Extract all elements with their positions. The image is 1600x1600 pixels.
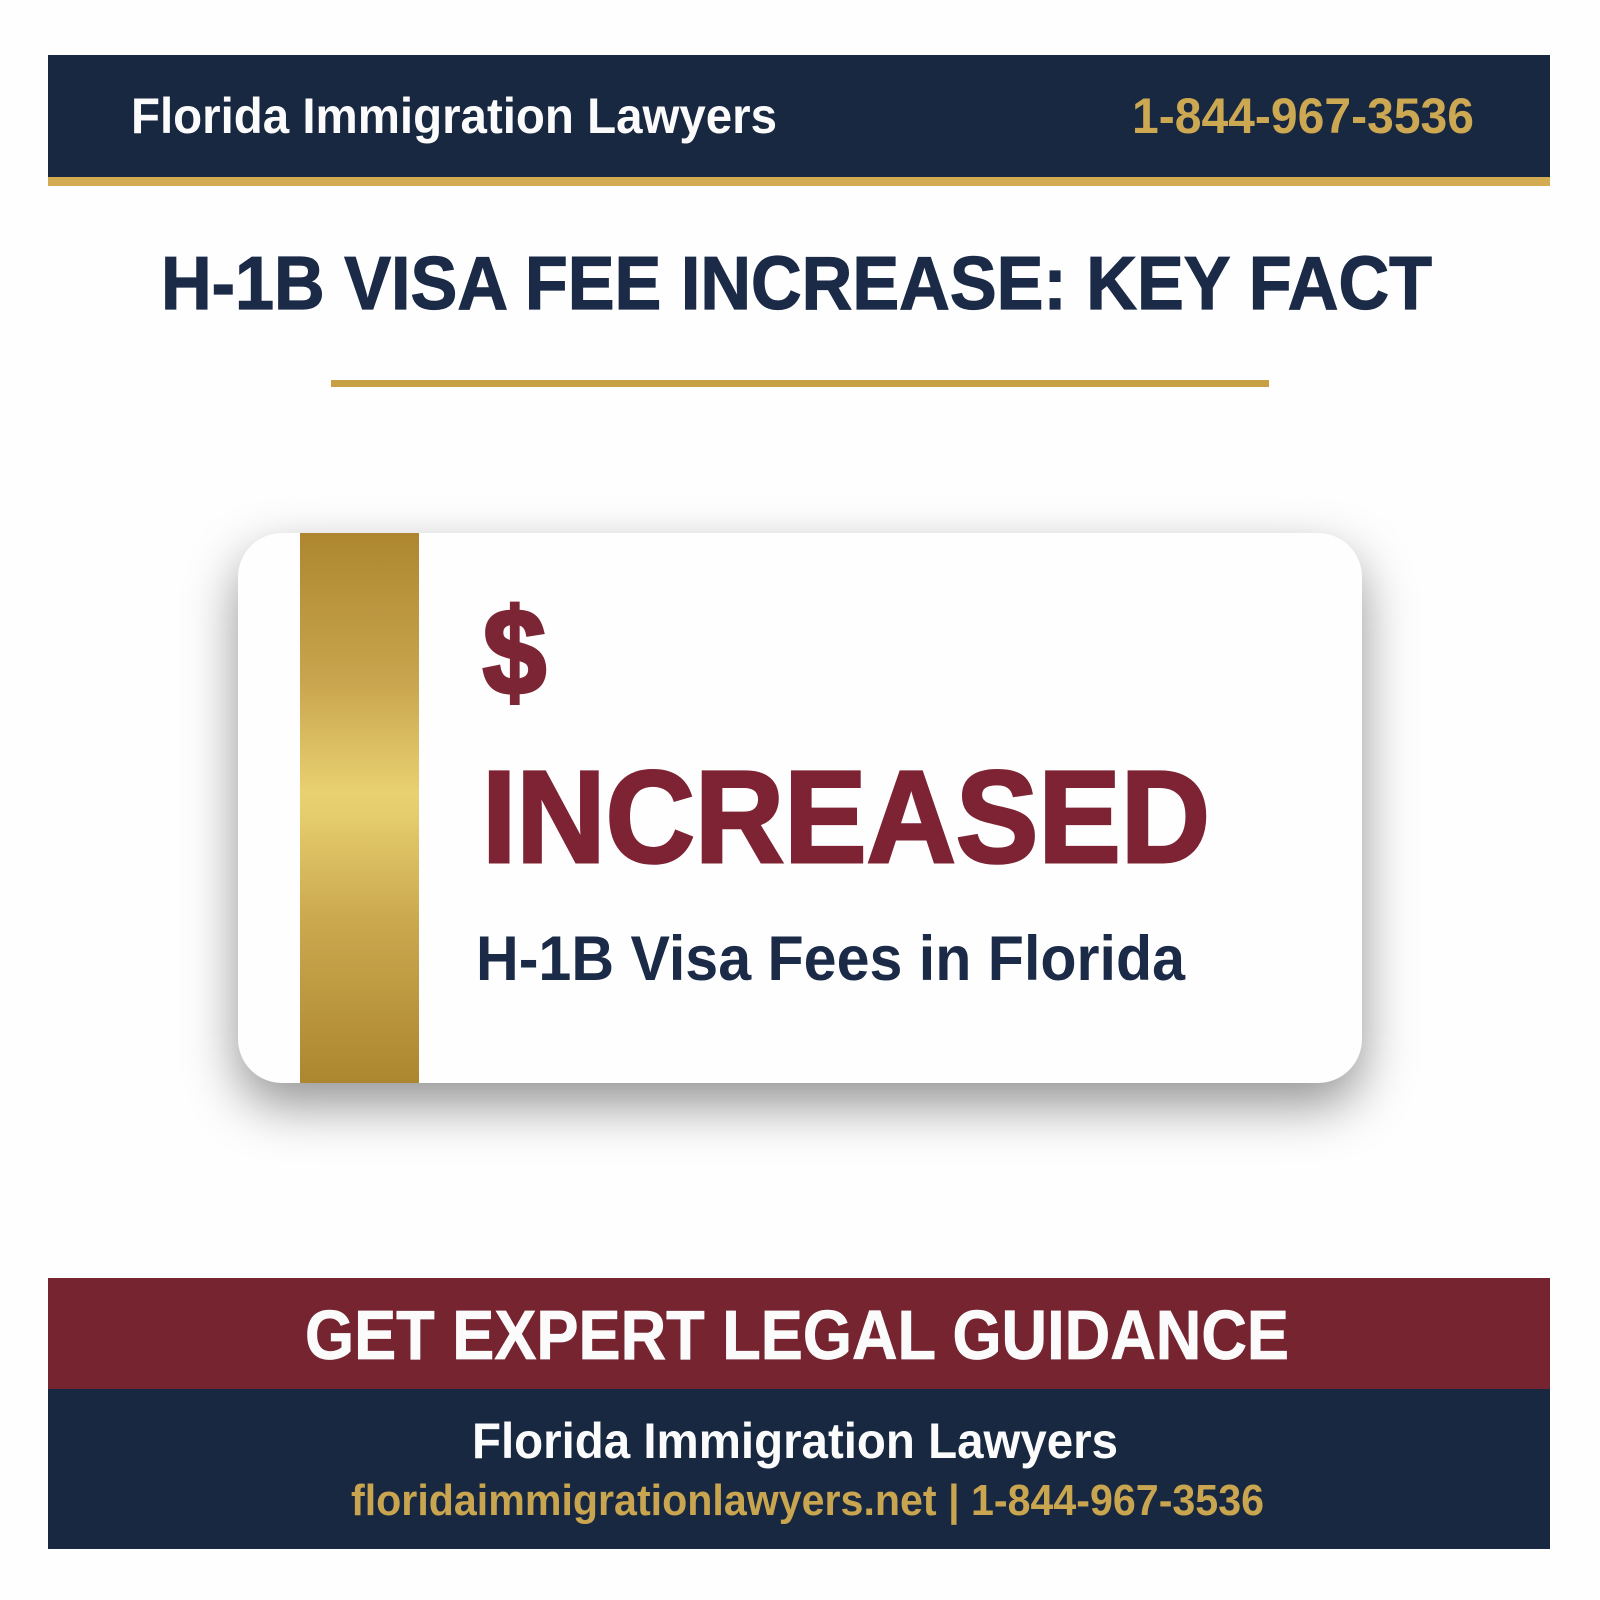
header banner xyxy=(48,55,1550,186)
key fact card xyxy=(238,533,1362,1105)
gold vertical bar xyxy=(300,533,419,1083)
title: H-1B VISA FEE INCREASE: KEY FACT xyxy=(161,241,1432,325)
header firm name: Florida Immigration Lawyers xyxy=(131,88,777,144)
footer website and phone: floridaimmigrationlawyers.net | 1-844-967-3536 xyxy=(351,1476,1264,1526)
gold divider under title xyxy=(331,380,1269,387)
header phone number: 1-844-967-3536 xyxy=(1132,88,1474,144)
INCREASED headline: INCREASED xyxy=(482,743,1210,890)
icon: dollar sign: $ xyxy=(483,584,546,720)
footer contact panel xyxy=(48,1389,1550,1549)
card subtext: H-1B Visa Fees in Florida xyxy=(476,924,1186,994)
call to action text: GET EXPERT LEGAL GUIDANCE xyxy=(305,1296,1289,1374)
footer firm name: Florida Immigration Lawyers xyxy=(472,1413,1118,1469)
call to action banner xyxy=(48,1278,1550,1389)
